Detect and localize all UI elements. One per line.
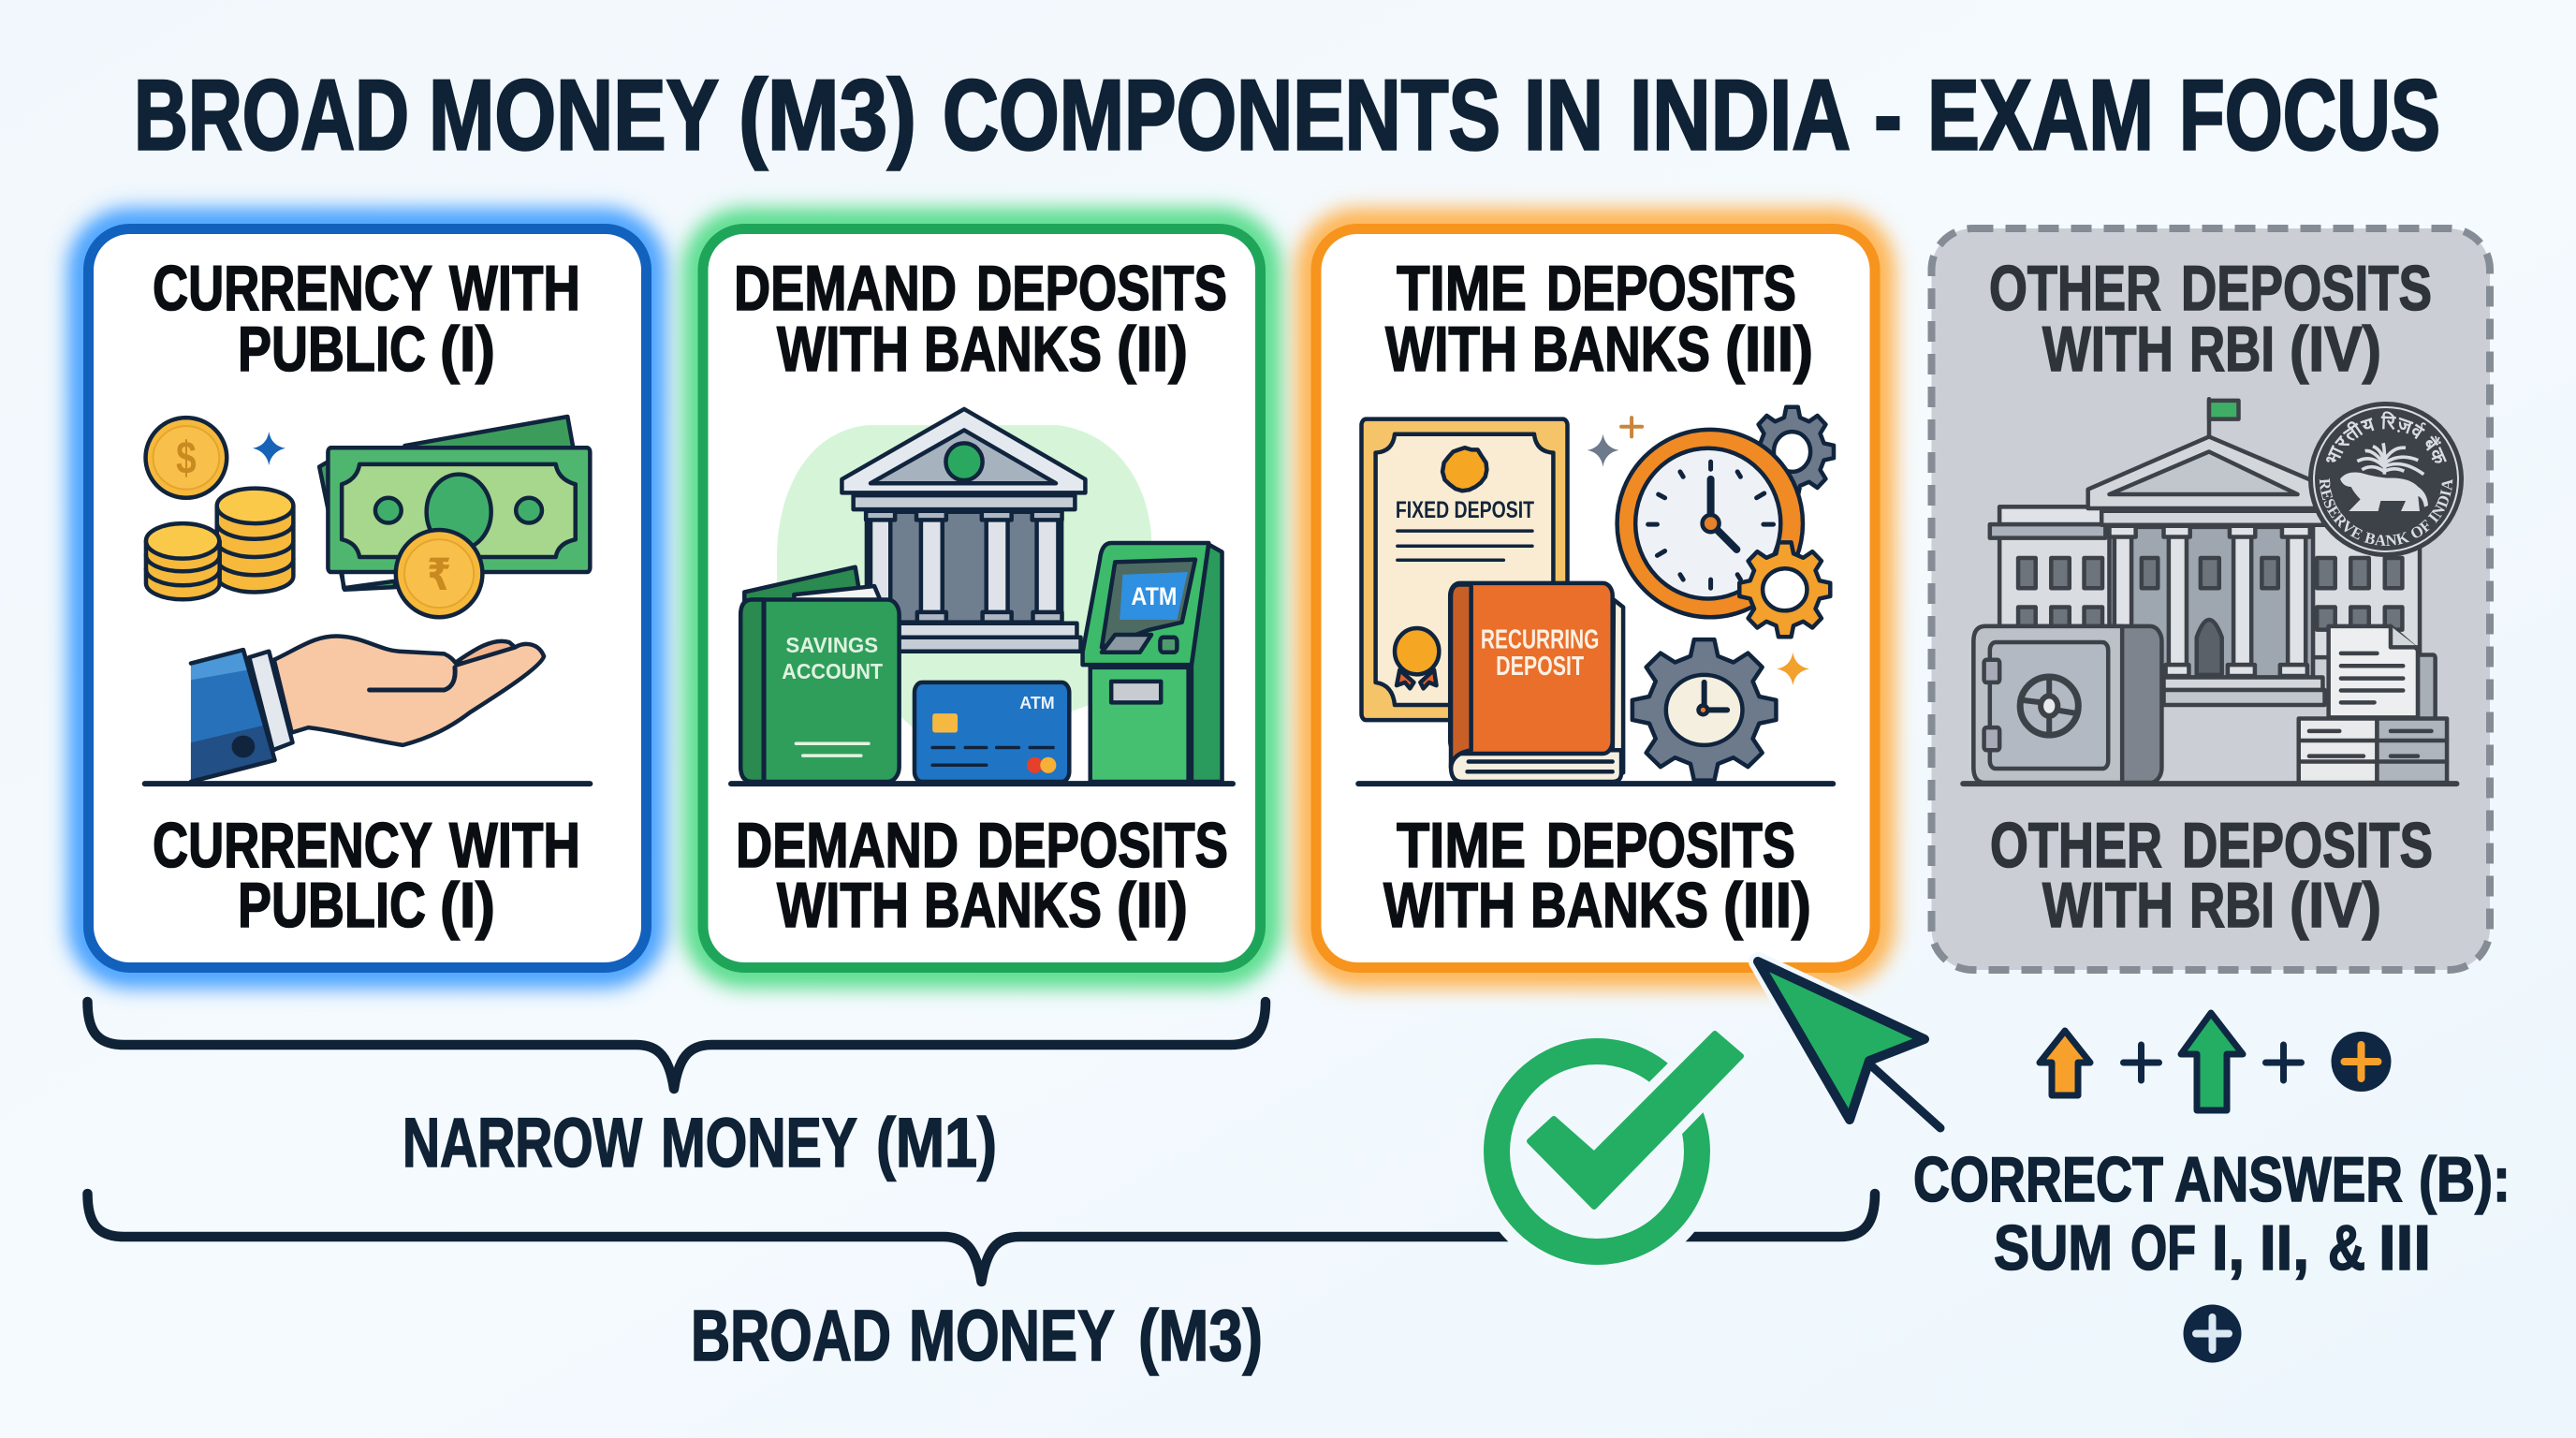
panel: currency with public — [82, 223, 651, 974]
heading: currency with public, top: (I) — [440, 314, 495, 385]
heading: currency with public, top: CURRENCY — [153, 253, 432, 324]
callout: correct answer: ANSWER — [2174, 1144, 2403, 1215]
heading: other deposits with RBI, top: RBI — [2189, 314, 2275, 385]
icon: circled orange plus — [2331, 1032, 2391, 1092]
heading: demand deposits with banks, top: BANKS — [924, 314, 1102, 385]
icon: certificate, book, clock and gears: RECURRING — [1481, 625, 1599, 654]
label: other deposits with RBI, bottom: OTHER — [1990, 810, 2162, 881]
label: other deposits with RBI, bottom — [1990, 810, 2433, 941]
icon: bank, passbook, card and ATM — [731, 409, 1233, 784]
icon: plus — [2265, 1045, 2301, 1080]
label: currency with public, bottom: WITH — [449, 810, 580, 881]
icon: RBI seal: भारतीय रिज़र्व बैंक — [2326, 411, 2447, 463]
heading: demand deposits with banks, top: WITH — [777, 314, 909, 385]
label: demand deposits with banks, bottom — [736, 810, 1228, 941]
callout: correct answer: I, — [2212, 1212, 2245, 1284]
callout: correct answer: III — [2378, 1212, 2431, 1284]
icon: bank, passbook, card and ATM: SAVINGS — [785, 634, 878, 657]
heading: time deposits with banks, top: BANKS — [1532, 314, 1710, 385]
icon: coins, banknotes and open hand: $ — [176, 433, 197, 484]
icon: RBI seal — [2308, 402, 2464, 557]
heading: time deposits with banks, top: DEPOSITS — [1546, 253, 1796, 324]
icon: coins, banknotes and open hand: ₹ — [427, 550, 451, 599]
panel: time deposits with banks — [1310, 223, 1881, 974]
icon: orange up arrow — [2040, 1031, 2090, 1095]
callout: correct answer: SUM — [1994, 1212, 2113, 1284]
callout: correct answer: & — [2328, 1212, 2365, 1284]
label: time deposits with banks, bottom: WITH — [1383, 870, 1515, 941]
label: time deposits with banks, bottom: BANKS — [1530, 870, 1708, 941]
icon: bank, passbook, card and ATM: ACCOUNT — [782, 660, 883, 684]
icon: certificate, book, clock and gears: FIXED DEPOSIT — [1396, 497, 1535, 523]
label: other deposits with RBI, bottom: (IV) — [2290, 870, 2381, 941]
heading: other deposits with RBI, top: (IV) — [2290, 314, 2381, 385]
icon: certificate, book, clock and gears — [1358, 407, 1834, 784]
title: EXAM — [1927, 58, 2154, 170]
bracket: narrow money — [88, 1002, 1266, 1089]
title: INDIA — [1630, 58, 1851, 170]
callout: correct answer: II, — [2260, 1212, 2309, 1284]
label: time deposits with banks, bottom: TIME — [1397, 810, 1526, 881]
label: demand deposits with banks, bottom: BANKS — [924, 870, 1102, 941]
label: demand deposits with banks, bottom: DEPOSITS — [977, 810, 1228, 881]
heading: other deposits with RBI, top — [1989, 253, 2432, 385]
icon: circled plus — [2183, 1305, 2241, 1363]
heading: currency with public, top: PUBLIC — [238, 314, 426, 385]
label: other deposits with RBI, bottom: RBI — [2189, 870, 2275, 941]
label: broad money: (M3) — [1138, 1296, 1263, 1376]
heading: other deposits with RBI, top: DEPOSITS — [2181, 253, 2432, 324]
callout: correct answer: (B): — [2419, 1144, 2510, 1215]
label: narrow money: (M1) — [876, 1104, 997, 1181]
icon: RBI seal: RESERVE BANK OF INDIA — [2320, 477, 2452, 547]
bracket: broad money — [88, 1194, 1875, 1282]
heading: currency with public, top — [153, 253, 580, 385]
icon: RBI building, safe and documents — [1963, 399, 2456, 784]
icon: green up arrow — [2181, 1013, 2243, 1110]
heading: time deposits with banks, top: WITH — [1385, 314, 1517, 385]
callout: correct answer: OF — [2130, 1212, 2196, 1284]
label: currency with public, bottom: (I) — [440, 870, 495, 941]
heading: demand deposits with banks, top: DEPOSITS — [976, 253, 1227, 324]
icon: cursor arrow — [1758, 961, 1940, 1128]
heading: time deposits with banks, top: (III) — [1725, 314, 1813, 385]
heading: time deposits with banks, top — [1385, 253, 1813, 385]
label: broad money: BROAD — [691, 1296, 891, 1376]
label: narrow money: MONEY — [661, 1104, 857, 1181]
label: narrow money: NARROW — [402, 1104, 642, 1181]
callout: correct answer: CORRECT — [1913, 1144, 2163, 1215]
heading: demand deposits with banks, top — [734, 253, 1227, 385]
label: narrow money — [402, 1104, 997, 1181]
label: demand deposits with banks, bottom: WITH — [777, 870, 909, 941]
title: BROAD — [134, 58, 409, 170]
heading: demand deposits with banks, top: DEMAND — [734, 253, 957, 324]
label: currency with public, bottom — [153, 810, 580, 941]
heading: time deposits with banks, top: TIME — [1397, 253, 1527, 324]
label: time deposits with banks, bottom: (III) — [1723, 870, 1811, 941]
label: other deposits with RBI, bottom: WITH — [2042, 870, 2174, 941]
title: - — [1874, 58, 1902, 170]
panel: other deposits with RBI — [1928, 225, 2494, 974]
callout: correct answer — [1913, 1144, 2510, 1284]
label: time deposits with banks, bottom: DEPOSITS — [1546, 810, 1795, 881]
icon: plus — [2123, 1045, 2159, 1080]
heading: other deposits with RBI, top: OTHER — [1989, 253, 2161, 324]
heading: currency with public, top: WITH — [449, 253, 580, 324]
title — [134, 58, 2440, 170]
label: currency with public, bottom: PUBLIC — [238, 870, 426, 941]
label: demand deposits with banks, bottom: DEMAND — [736, 810, 959, 881]
panel: demand deposits with banks — [697, 223, 1266, 974]
title: MONEY — [429, 58, 719, 170]
icon: coins, banknotes and open hand — [145, 417, 590, 784]
title: COMPONENTS — [943, 58, 1500, 170]
heading: demand deposits with banks, top: (II) — [1117, 314, 1188, 385]
label: currency with public, bottom: CURRENCY — [153, 810, 432, 881]
title: FOCUS — [2179, 58, 2440, 170]
label: time deposits with banks, bottom — [1383, 810, 1811, 941]
label: broad money — [691, 1296, 1263, 1376]
label: broad money: MONEY — [909, 1296, 1115, 1376]
title: (M3) — [739, 58, 916, 170]
title: IN — [1524, 58, 1603, 170]
label: demand deposits with banks, bottom: (II) — [1117, 870, 1188, 941]
icon: bank, passbook, card and ATM: ATM — [1019, 694, 1055, 712]
label: other deposits with RBI, bottom: DEPOSITS — [2182, 810, 2433, 881]
heading: other deposits with RBI, top: WITH — [2042, 314, 2174, 385]
icon: certificate, book, clock and gears: DEPOSIT — [1496, 652, 1584, 682]
icon: bank, passbook, card and ATM: ATM — [1131, 582, 1177, 611]
icon: green check mark — [1471, 1025, 1741, 1278]
